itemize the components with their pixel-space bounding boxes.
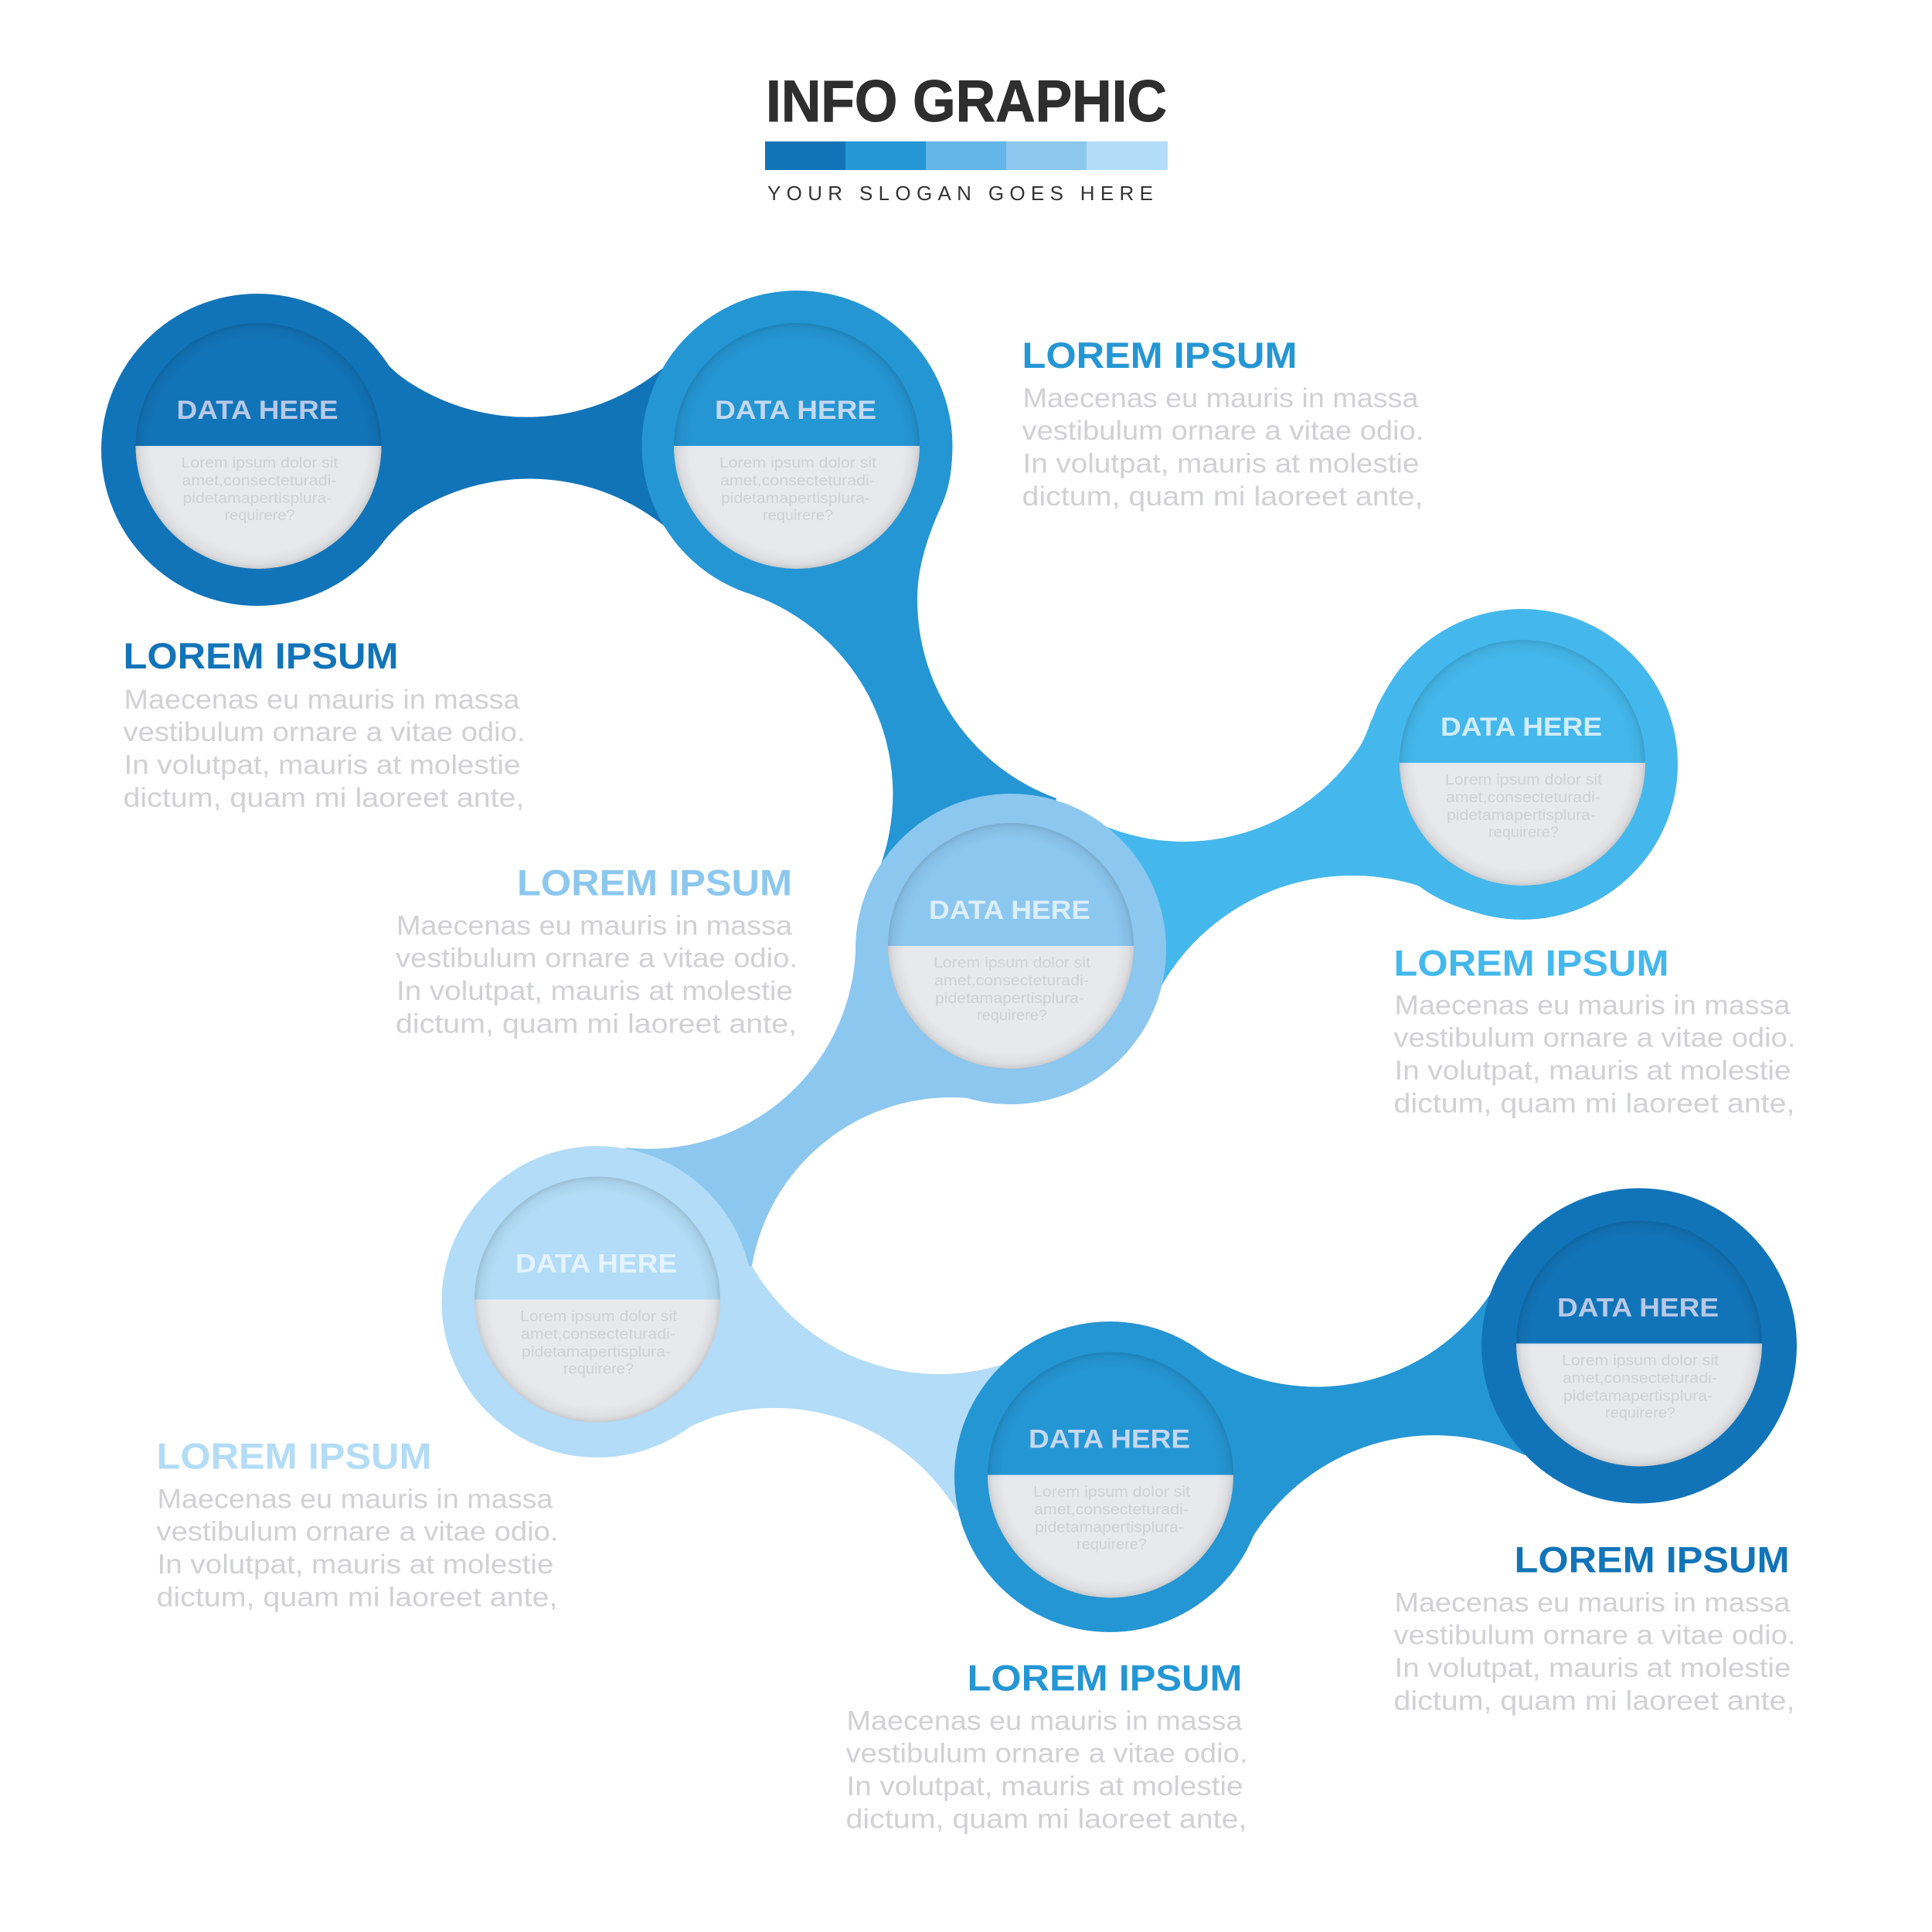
- node 6 inner disc: amet,consecteturadi-: [1034, 1502, 1189, 1518]
- text block 2: dictum, quam mi laoreet ante,: [1022, 481, 1423, 512]
- connector: node 3 to node 4: [1011, 663, 1522, 988]
- node 7 inner disc: DATA HERE: [1557, 1294, 1719, 1323]
- node 6 inner disc: DATA HERE: [1029, 1425, 1190, 1454]
- node 3 inner disc: Lorem ipsum dolor sit: [1445, 772, 1603, 788]
- connector: node 6 to node 7: [1110, 1292, 1639, 1569]
- node 7 inner disc: requirere?: [1605, 1405, 1675, 1422]
- text block 5: [156, 1436, 558, 1612]
- node 6 inner disc: Lorem ipsum dolor sit: [1033, 1484, 1191, 1501]
- node 1 inner disc: amet,consecteturadi-: [182, 473, 337, 489]
- connector: node 2 to node 4: [751, 456, 1056, 949]
- text block 2: vestibulum ornare a vitae odio.: [1022, 416, 1423, 446]
- text block 4: vestibulum ornare a vitae odio.: [396, 943, 798, 974]
- text block 3: Maecenas eu mauris in massa: [1394, 991, 1791, 1020]
- text block 6: [845, 1657, 1247, 1835]
- node 3 base: [1367, 609, 1678, 920]
- node 4 inner disc: [888, 823, 1134, 1069]
- text block 2: [1022, 335, 1423, 512]
- node 6 inner disc: requirere?: [1077, 1536, 1147, 1553]
- text block 1: [124, 635, 526, 813]
- text block 7: vestibulum ornare a vitae odio.: [1394, 1620, 1796, 1651]
- text block 7: dictum, quam mi laoreet ante,: [1394, 1686, 1794, 1716]
- text block 6: Maecenas eu mauris in massa: [847, 1706, 1243, 1736]
- text block 4: dictum, quam mi laoreet ante,: [396, 1009, 797, 1039]
- node 2 inner disc: [674, 323, 920, 569]
- connector: node 1 to node 2: [257, 354, 668, 547]
- node 7 inner disc: amet,consecteturadi-: [1563, 1371, 1717, 1386]
- node 1 inner disc: Lorem ipsum dolor sit: [181, 455, 338, 471]
- colour bar: [765, 141, 1168, 170]
- node 3 inner disc: [1400, 640, 1645, 886]
- text block 3: [1394, 943, 1796, 1119]
- text block 6: dictum, quam mi laoreet ante,: [845, 1804, 1247, 1835]
- text block 6: In volutpat, mauris at molestie: [847, 1771, 1243, 1801]
- node 3 inner disc: pidetamapertisplura-: [1447, 808, 1596, 824]
- text block 2: In volutpat, mauris at molestie: [1023, 448, 1419, 479]
- node 4 inner disc: requirere?: [977, 1008, 1047, 1024]
- text block 3: In volutpat, mauris at molestie: [1394, 1056, 1791, 1086]
- text block 7: LOREM IPSUM: [1515, 1539, 1790, 1580]
- text block 5: dictum, quam mi laoreet ante,: [156, 1583, 558, 1612]
- node 4 inner disc: amet,consecteturadi-: [934, 973, 1089, 989]
- node 3 inner disc: requirere?: [1488, 825, 1559, 841]
- node 6 base: [954, 1321, 1265, 1632]
- node 5 inner disc: amet,consecteturadi-: [521, 1326, 675, 1343]
- node 5 inner disc: pidetamapertisplura-: [522, 1345, 671, 1360]
- text block 3: LOREM IPSUM: [1394, 943, 1669, 983]
- node 4 base: [855, 794, 1166, 1104]
- text block 1: vestibulum ornare a vitae odio.: [124, 717, 526, 747]
- text block 5: LOREM IPSUM: [156, 1436, 431, 1476]
- node 1 base: [101, 294, 413, 606]
- text block 3: vestibulum ornare a vitae odio.: [1394, 1023, 1796, 1053]
- text block 4: LOREM IPSUM: [517, 862, 792, 903]
- text block 2: LOREM IPSUM: [1022, 335, 1297, 376]
- node 4 inner disc: DATA HERE: [929, 896, 1090, 925]
- node 2 inner disc: pidetamapertisplura-: [721, 491, 870, 507]
- node 2 inner disc: Lorem ipsum dolor sit: [719, 455, 877, 471]
- text block 1: In volutpat, mauris at molestie: [124, 750, 521, 781]
- node 4 inner disc: pidetamapertisplura-: [935, 991, 1084, 1007]
- node 3 inner disc: DATA HERE: [1440, 713, 1602, 742]
- text block 5: Maecenas eu mauris in massa: [158, 1484, 553, 1515]
- node 2 inner disc: requirere?: [763, 508, 833, 524]
- node 6 inner disc: pidetamapertisplura-: [1035, 1519, 1184, 1536]
- text block 1: LOREM IPSUM: [124, 635, 399, 676]
- text block 4: In volutpat, mauris at molestie: [396, 976, 793, 1006]
- node 2 inner disc: amet,consecteturadi-: [720, 473, 875, 489]
- title: INFO GRAPHIC: [766, 69, 1167, 134]
- text block 4: Maecenas eu mauris in massa: [396, 910, 793, 941]
- node 5 base: [442, 1146, 753, 1458]
- text block 4: [396, 862, 798, 1039]
- node 2 inner disc: DATA HERE: [715, 396, 876, 425]
- node 1 inner disc: [136, 323, 382, 569]
- connector: node 4 to node 5: [597, 949, 1011, 1301]
- node 6 inner disc: [988, 1352, 1233, 1598]
- node 7 inner disc: [1516, 1221, 1762, 1467]
- node 5 inner disc: Lorem ipsum dolor sit: [520, 1309, 678, 1325]
- slogan: YOUR SLOGAN GOES HERE: [767, 182, 1153, 205]
- node 5 inner disc: requirere?: [563, 1362, 634, 1377]
- text block 2: Maecenas eu mauris in massa: [1023, 383, 1419, 413]
- node 1 inner disc: pidetamapertisplura-: [182, 491, 332, 507]
- node 7 inner disc: pidetamapertisplura-: [1563, 1388, 1713, 1405]
- text block 7: In volutpat, mauris at molestie: [1394, 1653, 1791, 1683]
- text block 5: vestibulum ornare a vitae odio.: [156, 1516, 558, 1547]
- text block 5: In volutpat, mauris at molestie: [158, 1549, 553, 1580]
- node 1 inner disc: requirere?: [224, 508, 295, 524]
- node 7 inner disc: Lorem ipsum dolor sit: [1562, 1352, 1719, 1369]
- node 1 inner disc: DATA HERE: [176, 396, 338, 425]
- node 5 inner disc: DATA HERE: [515, 1249, 677, 1278]
- text block 1: Maecenas eu mauris in massa: [124, 685, 520, 715]
- text block 3: dictum, quam mi laoreet ante,: [1394, 1088, 1794, 1119]
- node 7 base: [1481, 1189, 1797, 1504]
- text block 6: vestibulum ornare a vitae odio.: [845, 1739, 1247, 1768]
- text block 7: [1394, 1539, 1796, 1716]
- text block 6: LOREM IPSUM: [968, 1657, 1243, 1699]
- connector: node 5 to node 6: [597, 1266, 1110, 1511]
- node 5 inner disc: [474, 1176, 720, 1422]
- node 2 base: [641, 291, 952, 601]
- text block 1: dictum, quam mi laoreet ante,: [124, 783, 524, 813]
- text block 7: Maecenas eu mauris in massa: [1394, 1587, 1791, 1618]
- node 4 inner disc: Lorem ipsum dolor sit: [934, 955, 1091, 971]
- node 3 inner disc: amet,consecteturadi-: [1446, 790, 1600, 806]
